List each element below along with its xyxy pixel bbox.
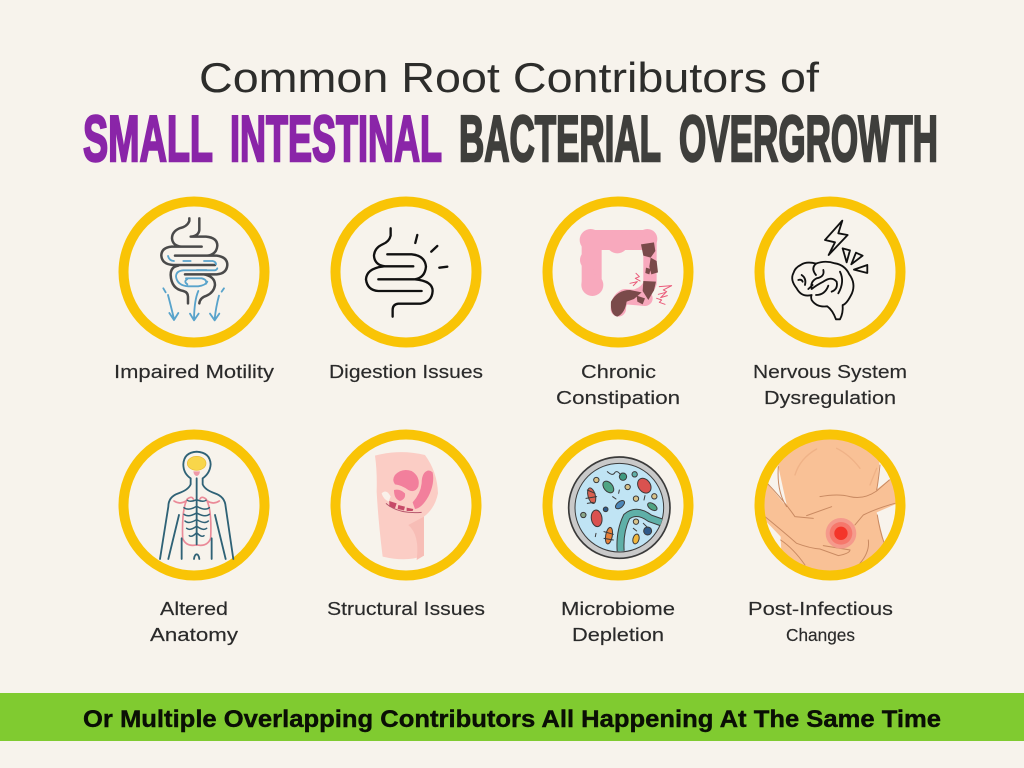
heading: small intestinal — [83, 102, 442, 175]
item: digestion issues — [329, 202, 483, 382]
title: common root contributors: Common Root Contributors of — [199, 54, 819, 101]
icon: human body nervous system — [160, 452, 233, 559]
ring: impaired motility — [124, 202, 264, 342]
label line: microbiome: Microbiome — [561, 598, 675, 619]
label: impaired motility: Impaired Motility — [114, 361, 275, 382]
item: impaired motility — [114, 202, 275, 382]
heading: bacterial overgrowth: BACTERIAL — [459, 102, 661, 175]
icon: intestine with pain rays — [366, 228, 447, 317]
icon: intestine with downward arrows — [161, 218, 227, 320]
icon: petri dish with microbes — [569, 457, 670, 558]
label: microbiome depletion — [561, 598, 675, 645]
ring: altered anatomy — [124, 434, 264, 576]
label: altered anatomy — [150, 598, 239, 645]
ring: digestion issues — [336, 202, 476, 342]
ring: microbiome depletion — [548, 434, 688, 576]
icon: colon with stool — [580, 229, 672, 317]
icon: abdomen with hands and pain spot — [764, 440, 896, 570]
label line: chronic: Chronic — [581, 361, 656, 382]
item: chronic constipation — [548, 202, 688, 408]
label line: altered: Altered — [160, 598, 228, 619]
label: chronic constipation — [556, 361, 680, 408]
label line: dysregulation: Dysregulation — [764, 387, 896, 408]
footer text: Or Multiple Overlapping Contributors All Happening At The Same Time — [83, 706, 941, 733]
item: structural issues — [327, 434, 485, 619]
ring: nervous system dysregulation — [760, 202, 900, 342]
icon: brain with lightning bolt — [792, 221, 867, 319]
label: structural issues: Structural Issues — [327, 598, 485, 619]
label line: depletion: Depletion — [572, 624, 664, 645]
heading: small intestinal: SMALL — [83, 102, 213, 175]
item: post-infectious changes — [748, 434, 900, 645]
label line: post-infectious: Post-Infectious — [748, 598, 893, 619]
label line: nervous system: Nervous System — [753, 361, 907, 382]
label line: changes: Changes — [786, 625, 855, 645]
label line: constipation: Constipation — [556, 387, 680, 408]
heading: small intestinal: INTESTINAL — [230, 102, 442, 175]
item: microbiome depletion — [548, 434, 688, 645]
label: digestion issues: Digestion Issues — [329, 361, 483, 382]
label: nervous system dysregulation — [753, 361, 907, 408]
ring: post-infectious changes — [760, 434, 900, 576]
item: nervous system dysregulation — [753, 202, 907, 408]
label line: anatomy: Anatomy — [150, 624, 239, 645]
ring: structural issues — [336, 434, 476, 576]
ring: chronic constipation — [548, 202, 688, 342]
item: altered anatomy — [124, 434, 264, 645]
icon: pelvis cross-section — [375, 452, 438, 560]
footer banner — [0, 693, 1024, 741]
label: post-infectious changes — [748, 598, 893, 645]
